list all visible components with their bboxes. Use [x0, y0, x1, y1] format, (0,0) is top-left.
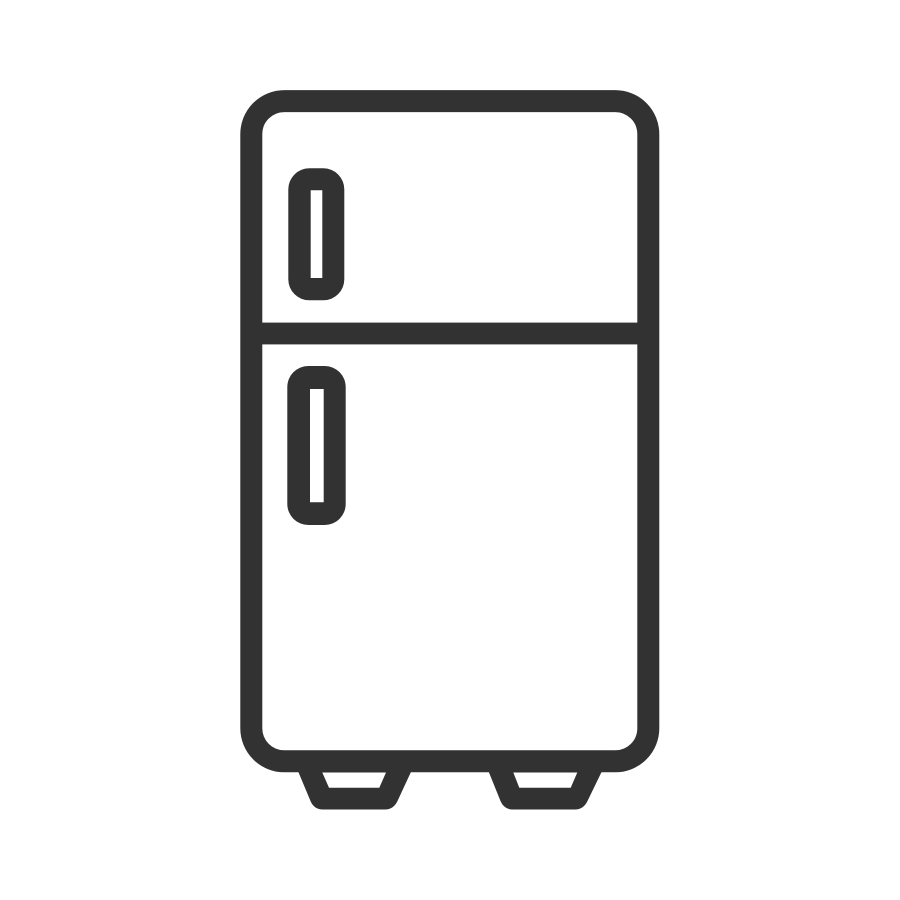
door divider: [241, 323, 659, 344]
upper door handle: [288, 168, 344, 300]
lower door handle: [287, 366, 346, 525]
right foot: [487, 768, 604, 810]
fridge body: [251, 101, 648, 761]
left foot: [297, 768, 413, 810]
